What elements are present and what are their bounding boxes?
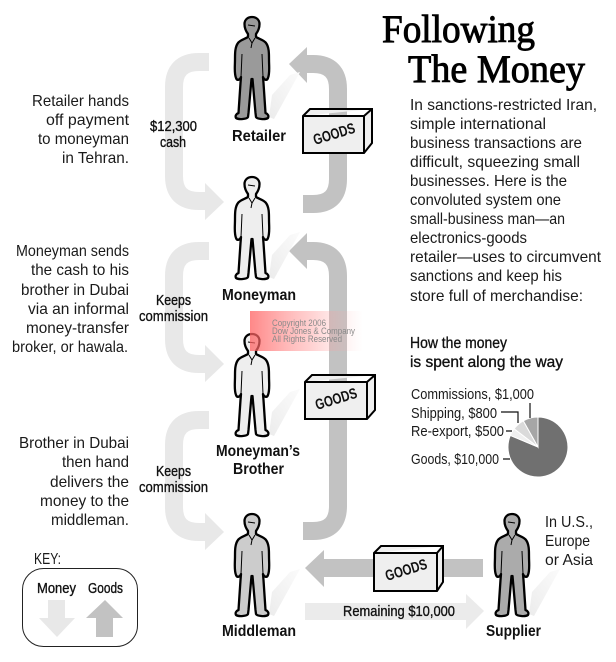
label: keeps commission 2: commission	[139, 480, 208, 496]
text: location of supplier: Europe	[545, 533, 590, 550]
pie chart heading	[410, 335, 563, 371]
label: moneyman's brother: Moneyman’s	[216, 443, 300, 460]
label: supplier: Supplier	[486, 623, 541, 640]
intro text: convoluted system one	[410, 192, 561, 209]
pie chart: how the money is spent	[508, 417, 568, 477]
text: location of supplier	[545, 514, 593, 569]
pie labels: Goods, $10,000	[411, 451, 499, 468]
arrow: remaining money to supplier	[305, 594, 484, 629]
label: moneyman's brother	[216, 443, 300, 478]
label: remaining $10,000: Remaining $10,000	[343, 604, 455, 620]
text: step 3	[19, 435, 129, 529]
arrow: money, moneyman to brother	[174, 251, 224, 382]
title: The Money	[408, 48, 585, 91]
copyright notice	[250, 311, 363, 351]
label: keeps commission 1	[139, 293, 208, 325]
label: middleman: Middleman	[222, 623, 296, 640]
arrow: goods, moneyman to retailer	[289, 47, 338, 204]
pie labels: Commissions, $1,000	[411, 386, 534, 403]
figure: middleman	[235, 514, 300, 616]
icon: goods arrow	[86, 600, 123, 637]
copyright notice: All Rights Reserved	[272, 334, 342, 344]
icon: money arrow	[39, 600, 75, 637]
intro text: businesses. Here is the	[410, 173, 567, 190]
label: keeps commission 2: Keeps	[156, 464, 191, 480]
intro text: In sanctions-restricted Iran,	[410, 97, 597, 114]
text: step 2: via an informal	[28, 301, 129, 318]
label: retailer: Retailer	[232, 128, 286, 145]
label: keeps commission 1: commission	[139, 309, 208, 325]
intro text: sanctions and keep his	[410, 268, 562, 285]
text: step 2: broker, or hawala.	[12, 339, 128, 356]
text: step 3: delivers the	[50, 474, 129, 491]
pie labels: Re-export, $500	[411, 423, 504, 440]
figure: moneyman	[235, 177, 300, 279]
key box: Goods	[88, 581, 123, 597]
intro text: simple international	[410, 116, 546, 133]
figure: supplier	[495, 514, 560, 616]
text: step 2	[12, 243, 130, 356]
title: Following	[382, 8, 535, 51]
intro text: difficult, squeezing small	[410, 154, 580, 171]
slice: shipping	[514, 421, 538, 447]
label: $12,300 cash	[150, 119, 197, 151]
text: step 2: the cash to his	[31, 262, 129, 279]
label: keeps commission 1: Keeps	[156, 293, 191, 309]
figure: retailer	[235, 17, 300, 119]
text: step 1: off payment	[46, 112, 130, 129]
label: moneyman: Moneyman	[222, 287, 296, 304]
arrow: goods, middleman to moneyman	[289, 233, 338, 531]
goods box: bottom	[374, 546, 443, 591]
title	[382, 8, 585, 91]
goods box: top: GOODS	[311, 120, 357, 149]
text: step 2: money-transfer	[26, 320, 130, 337]
arrow: goods, supplier to middleman	[305, 550, 483, 587]
slice: goods	[508, 417, 568, 477]
pie chart heading: is spent along the way	[410, 354, 563, 371]
text: location of supplier: or Asia	[545, 552, 593, 569]
intro text: electronics-goods	[410, 230, 527, 247]
pie chart heading: How the money	[410, 335, 507, 352]
figure: moneyman's brother	[235, 334, 300, 436]
text: location of supplier: In U.S.,	[545, 514, 593, 531]
goods box: top	[303, 109, 372, 153]
text: step 3: Brother in Dubai	[19, 435, 129, 452]
text: step 3: middleman.	[51, 512, 129, 529]
text: step 1: Retailer hands	[32, 93, 129, 110]
intro text: business transactions are	[410, 135, 582, 152]
text: step 1: to moneyman	[38, 131, 129, 148]
intro text: small-business man—an	[410, 211, 565, 228]
text: step 3: money to the	[40, 493, 129, 510]
text: step 2: Moneyman sends	[16, 243, 129, 260]
intro text: retailer—uses to circumvent	[410, 249, 602, 266]
text: step 3: then hand	[62, 454, 129, 471]
label: keeps commission 2	[139, 464, 208, 496]
label: moneyman's brother: Brother	[233, 461, 284, 478]
label: $12,300 cash: cash	[160, 135, 186, 151]
goods box: middle	[305, 375, 375, 419]
text: step 2: brother in Dubai	[21, 282, 129, 299]
key box	[22, 568, 138, 646]
label: $12,300 cash: $12,300	[150, 119, 197, 135]
text: step 1: in Tehran.	[62, 150, 129, 167]
pie labels: Shipping, $800	[411, 405, 497, 422]
slice: commissions	[523, 417, 538, 447]
arrow: money, brother to middleman	[174, 420, 224, 550]
pie labels	[411, 386, 534, 468]
copyright notice: Copyright 2006	[272, 318, 326, 328]
arrow: money, retailer to moneyman	[174, 62, 224, 220]
intro text	[410, 97, 602, 305]
text: step 1	[32, 93, 130, 167]
key heading: KEY:	[34, 551, 61, 568]
key box: Money	[37, 581, 77, 597]
goods box: middle: GOODS	[313, 385, 359, 414]
intro text: store full of merchandise:	[410, 288, 583, 305]
goods box: bottom: GOODS	[383, 556, 429, 585]
slice: re-export	[510, 429, 538, 447]
copyright notice: Dow Jones & Company	[272, 326, 355, 336]
